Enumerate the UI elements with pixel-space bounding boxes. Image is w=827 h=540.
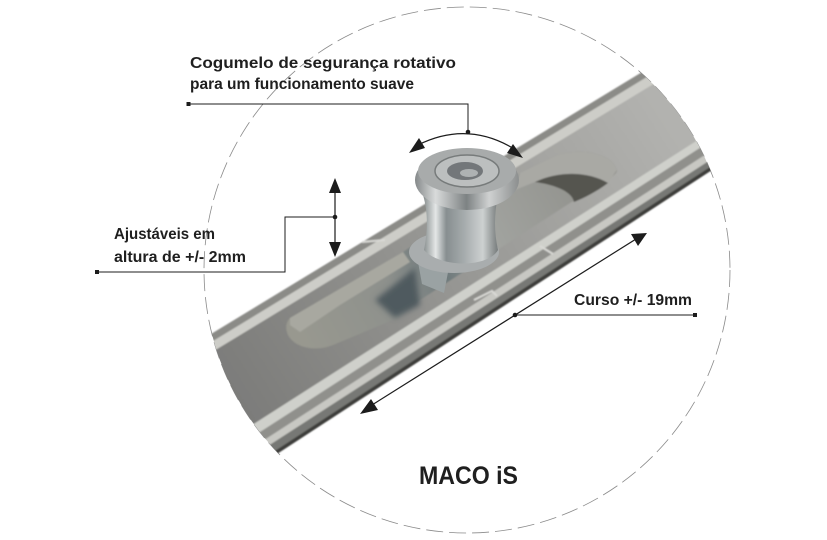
product name: MACO iS xyxy=(419,462,518,490)
rotation arrow xyxy=(418,134,516,150)
infographic xyxy=(95,6,730,534)
dashed circle outline xyxy=(204,7,730,533)
rib highlight xyxy=(265,156,707,445)
bottom dark edge xyxy=(276,167,710,454)
lower stem xyxy=(418,262,450,293)
lower light band xyxy=(254,141,700,432)
callout text: Cogumelo de segurança rotativo xyxy=(190,55,456,72)
slot left wall xyxy=(290,252,410,332)
slot right wall xyxy=(515,152,617,190)
callout text: Curso +/- 19mm xyxy=(574,292,692,309)
leader line xyxy=(97,217,335,272)
callout: rotating mushroom xyxy=(186,55,523,158)
diagonal arrow xyxy=(372,239,636,405)
bar body xyxy=(216,84,696,424)
flange xyxy=(409,231,499,273)
lower band shade xyxy=(260,148,704,438)
head rim xyxy=(415,150,519,210)
vertical arrow xyxy=(334,190,336,245)
tab marks on rib xyxy=(362,240,553,300)
leader line xyxy=(189,104,468,132)
callout: height adjustment: altura de +/- 2mm xyxy=(114,249,246,266)
slot inner shadow xyxy=(375,268,420,318)
head inner ring xyxy=(435,155,499,187)
rib shade xyxy=(288,162,710,438)
stem xyxy=(423,195,498,264)
leader line xyxy=(515,314,695,316)
hex socket xyxy=(447,162,483,180)
slot right shadow xyxy=(535,174,608,202)
slot xyxy=(286,152,617,348)
callout text: Ajustáveis em xyxy=(114,226,215,243)
security mushroom xyxy=(409,148,519,293)
top light band xyxy=(214,77,653,350)
callout: travel xyxy=(360,233,697,414)
metal bar photo xyxy=(212,72,711,454)
top edge band xyxy=(212,72,646,340)
callout: rotating mushroom: para um funcionamento suave xyxy=(190,76,414,93)
head top xyxy=(418,148,516,194)
callout: height adjustment xyxy=(95,178,341,274)
